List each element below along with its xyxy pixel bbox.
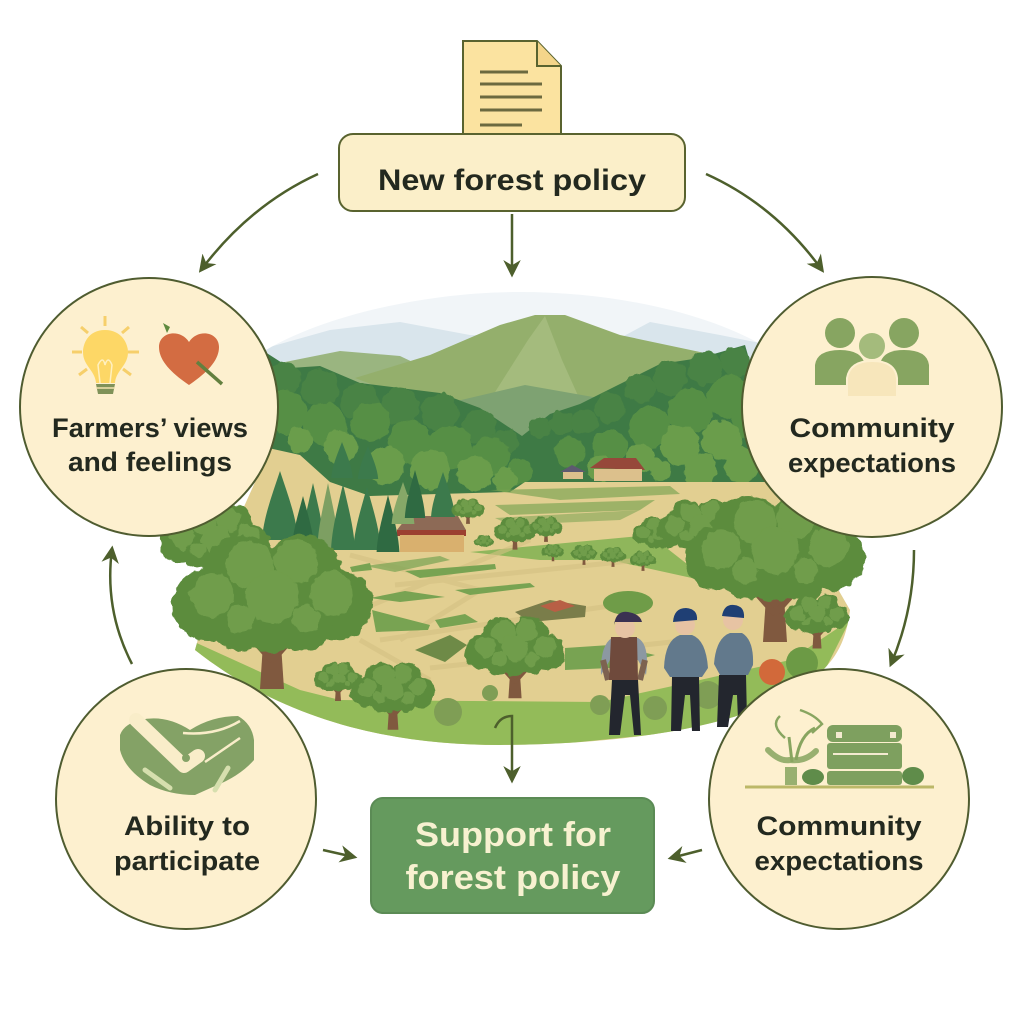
panel: ability to participate: participate [114, 846, 260, 876]
panel: farmers' views [20, 278, 278, 536]
forest base [255, 345, 790, 500]
panel: ability to participate [56, 669, 316, 929]
arrow: policy to farmers [201, 174, 318, 270]
forest canopy [263, 347, 772, 492]
arrow: policy to community [706, 174, 822, 270]
large tree crowns [160, 495, 865, 712]
panel: farmers' views: Farmers’ views [52, 413, 248, 443]
panel: community expectations top: Community [790, 413, 954, 443]
arrow: ability to farmers [110, 549, 132, 664]
main mountain [356, 315, 702, 400]
icon: people [815, 318, 929, 397]
ground [195, 448, 850, 745]
farmer 3 [714, 605, 753, 727]
large tree trunks [240, 578, 829, 730]
panel: community expectations top [742, 277, 1002, 537]
pines [262, 442, 455, 552]
crop strips [350, 486, 680, 670]
heading box: new forest policy: New forest policy [378, 164, 646, 197]
small trees [463, 513, 647, 571]
farmer 1 [601, 612, 647, 735]
illustration: forest landscape [150, 285, 880, 760]
heading box: new forest policy [339, 134, 685, 211]
outcome box: support for forest policy: Support for [415, 816, 611, 854]
icon: policy document [463, 41, 561, 152]
icon: heart [159, 323, 222, 385]
meadow [470, 536, 694, 578]
houses [397, 516, 466, 530]
icon: light bulb [72, 316, 139, 394]
panel: community expectations top: expectations [788, 448, 956, 478]
icon: handshake [120, 716, 254, 795]
panel: community expectations bottom: Community [756, 811, 922, 841]
arrow: ability to support [323, 850, 354, 857]
arrow: policy to landscape [511, 214, 513, 274]
left hill [285, 351, 410, 385]
arrow: landscape to support [495, 716, 512, 780]
arrow: expectations to support [671, 850, 702, 858]
outcome box: support for forest policy: forest policy [406, 859, 621, 897]
panel: community expectations bottom: expectations [754, 846, 924, 876]
panel: ability to participate: Ability to [124, 811, 250, 841]
ground bands [350, 540, 690, 680]
farmer 2 [664, 608, 708, 731]
panel: community expectations bottom [709, 669, 969, 929]
arrow: right circles [891, 550, 914, 664]
icon: plant and stacked resources [745, 710, 934, 787]
foreground shrubs [434, 681, 722, 726]
distant hills [266, 322, 758, 362]
farmers [601, 605, 753, 735]
grass [190, 620, 850, 750]
outcome box: support for forest policy [371, 798, 654, 913]
panel: farmers' views: and feelings [68, 447, 232, 477]
